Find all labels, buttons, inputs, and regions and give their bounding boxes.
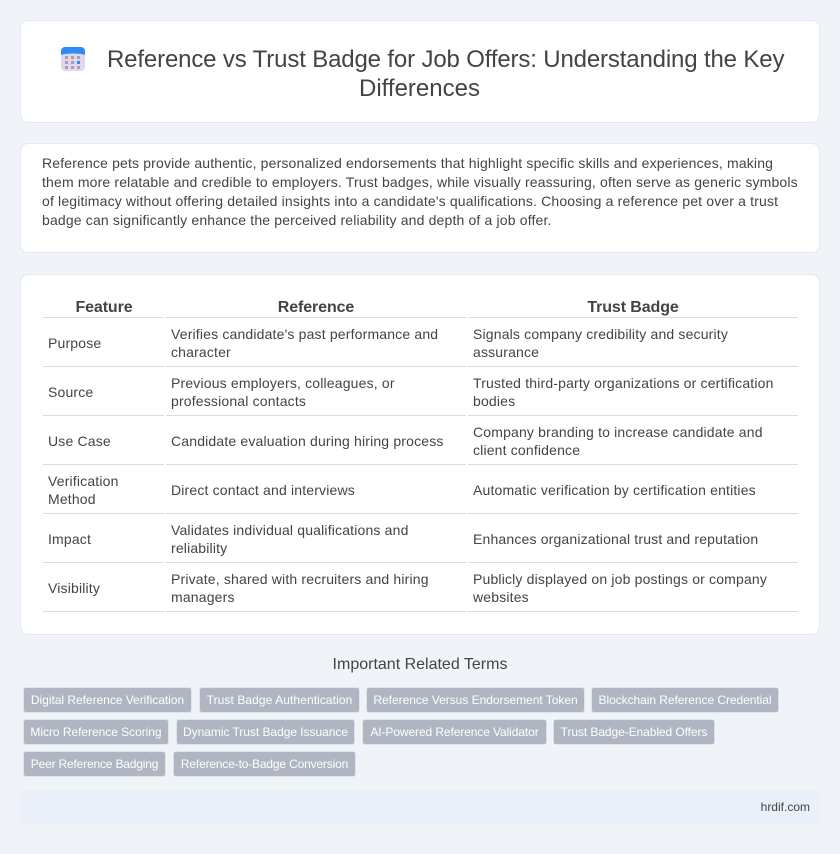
title: Differences (359, 75, 480, 102)
row: purpose: character (171, 344, 231, 360)
column headers: Trust Badge (587, 299, 679, 316)
intro text: badge can significantly enhance the perceived reliability and depth of a job offer. (42, 212, 552, 228)
tag: Dynamic Trust Badge Issuance (183, 725, 348, 739)
row: verification method: Automatic verification by certification entities (473, 482, 756, 498)
row: visibility: managers (171, 589, 235, 605)
row: source: bodies (473, 393, 515, 409)
footer source: hrdif.com (761, 800, 810, 814)
tag (23, 719, 169, 745)
row: use case: Company branding to increase candidate and (473, 424, 763, 440)
row: purpose: Signals company credibility and security (473, 326, 728, 342)
tag (173, 751, 356, 777)
tag (591, 687, 779, 713)
icon: calendar (61, 47, 85, 71)
tag: Micro Reference Scoring (30, 725, 162, 739)
row: source (48, 375, 774, 409)
tag: AI-Powered Reference Validator (370, 725, 539, 739)
row: use case: Candidate evaluation during hiring process (171, 433, 444, 449)
tag (553, 719, 715, 745)
tag (176, 719, 355, 745)
tag (199, 687, 360, 713)
comparison table (43, 299, 798, 612)
row: visibility: Private, shared with recruiters and hiring (171, 571, 429, 587)
row: purpose: Verifies candidate's past performance and (171, 326, 438, 342)
tag: Reference-to-Badge Conversion (181, 757, 348, 771)
row: use case: client confidence (473, 442, 580, 458)
column headers: Feature (75, 299, 133, 316)
intro text: Reference pets provide authentic, personalized endorsements that highlight specific skills and experiences, making (42, 155, 773, 171)
row: source: Source (48, 384, 93, 400)
row: visibility (48, 571, 767, 605)
intro text: of legitimacy without offering detailed insights into a candidate's qualifications. Choosing a reference pet over a trust (42, 193, 778, 209)
tag: Trust Badge Authentication (207, 693, 352, 707)
tag: Peer Reference Badging (31, 757, 158, 771)
row: visibility: Publicly displayed on job postings or company (473, 571, 767, 587)
heading: related terms: Important Related Terms (333, 656, 507, 673)
row: impact: reliability (171, 540, 227, 556)
row: impact: Impact (48, 531, 91, 547)
title (107, 46, 784, 102)
row: visibility: Visibility (48, 580, 100, 596)
column headers (75, 299, 679, 316)
tag: Blockchain Reference Credential (599, 693, 771, 707)
row: impact: Validates individual qualifications and (171, 522, 409, 538)
row: verification method: Method (48, 491, 96, 507)
row: impact (48, 522, 758, 556)
intro text (42, 155, 798, 228)
row: use case: Use Case (48, 433, 111, 449)
intro text: them more relatable and credible to employers. Trust badges, while visually reassuring, often serve as generic symbols (42, 174, 798, 190)
row: purpose: Purpose (48, 335, 101, 351)
related terms tags (23, 687, 779, 777)
row: purpose: assurance (473, 344, 539, 360)
row: source: Previous employers, colleagues, or (171, 375, 395, 391)
row: verification method: Direct contact and interviews (171, 482, 355, 498)
tag (366, 687, 585, 713)
row: source: professional contacts (171, 393, 306, 409)
column headers: Reference (278, 299, 354, 316)
footer (20, 790, 820, 824)
title: Reference vs Trust Badge for Job Offers: Understanding the Key (107, 46, 784, 73)
row: visibility: websites (473, 589, 529, 605)
panel: header (20, 20, 820, 123)
row: verification method (48, 473, 756, 507)
row: verification method: Verification (48, 473, 119, 489)
tag (362, 719, 547, 745)
row: use case (48, 424, 763, 458)
panel: introduction (20, 143, 820, 253)
row: source: Trusted third-party organizations or certification (473, 375, 774, 391)
tag (23, 751, 166, 777)
row: purpose (48, 326, 728, 360)
row: impact: Enhances organizational trust and reputation (473, 531, 758, 547)
panel: comparison table (20, 274, 820, 635)
tag: Trust Badge-Enabled Offers (561, 725, 707, 739)
tag: Digital Reference Verification (31, 693, 184, 707)
tag (23, 687, 192, 713)
tag: Reference Versus Endorsement Token (373, 693, 578, 707)
